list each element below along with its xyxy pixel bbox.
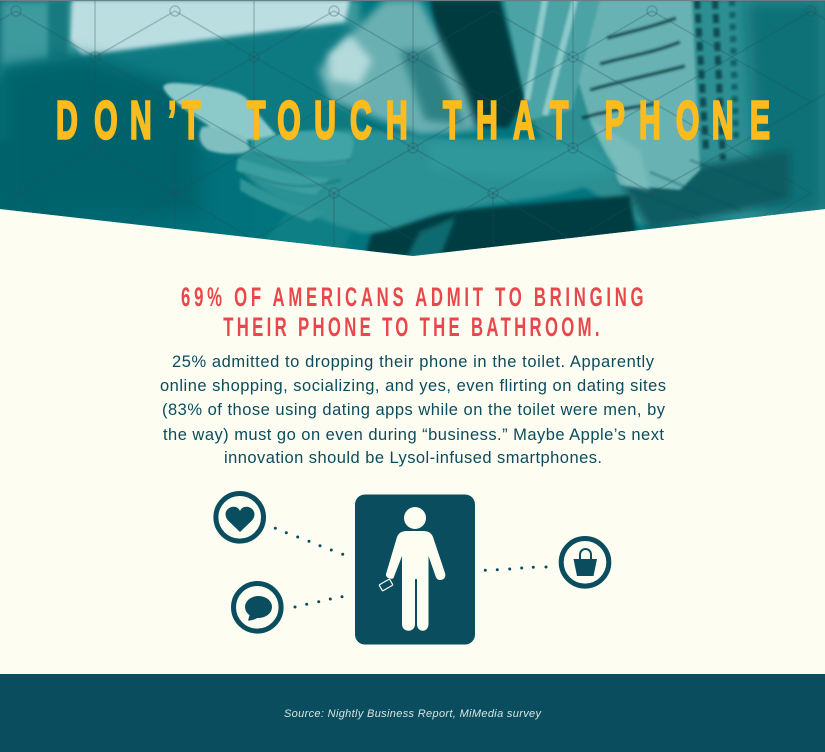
footer band [0, 674, 825, 752]
body paragraph: (83% of those using dating apps while on the toilet were men, by [162, 401, 666, 419]
photo: window and wall [0, 0, 360, 215]
icon: chat bubble circle [233, 584, 281, 631]
body paragraph: 25% admitted to dropping their phone in the toilet. Apparently [172, 353, 655, 371]
source note: Source: Nightly Business Report, MiMedia survey [284, 708, 542, 720]
photo: clothing [318, 0, 825, 230]
icon: shopping bag circle [561, 538, 609, 586]
subheading: THEIR PHONE TO THE BATHROOM. [223, 312, 600, 342]
body paragraph: online shopping, socializing, and yes, even flirting on dating sites [160, 377, 666, 395]
subheading: 69% OF AMERICANS ADMIT TO BRINGING [181, 282, 644, 312]
body paragraph: the way) must go on even during “business.” Maybe Apple’s next [163, 426, 664, 444]
icon: person with phone [379, 507, 445, 631]
icon: heart circle [216, 494, 264, 541]
photo: patterned shirt stripes [504, 1, 740, 192]
photo: lower dark legs [265, 195, 640, 256]
body paragraph [160, 353, 666, 467]
title: DON’T TOUCH THAT PHONE [0, 90, 770, 151]
person figure card [355, 494, 475, 644]
dotted connector: heart to person [274, 527, 344, 556]
body paragraph: innovation should be Lysol-infused smartphones. [224, 449, 602, 467]
dotted connector: person to bag [484, 566, 548, 572]
network line pattern overlay [0, 0, 825, 256]
header photo: hands holding phone [0, 0, 825, 260]
subheading [181, 282, 644, 342]
dotted connector: chat to person [294, 595, 344, 608]
photo: hand and arm [240, 120, 650, 233]
photo: fingers and phone [163, 83, 354, 222]
